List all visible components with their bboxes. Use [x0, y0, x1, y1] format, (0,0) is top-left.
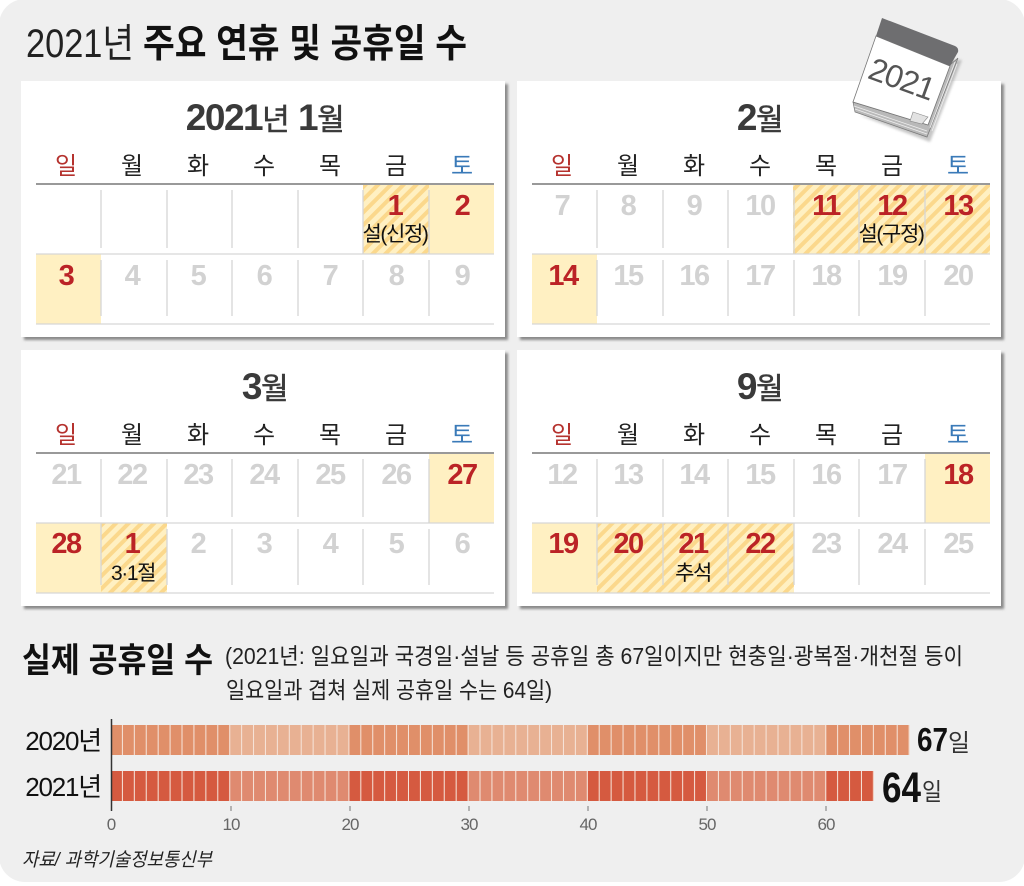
- weekday header: 수: [253, 422, 275, 449]
- weekday header: 화: [187, 153, 209, 180]
- weekday header: 일: [551, 153, 573, 180]
- month heading: 2월: [737, 97, 783, 138]
- dates: 1: [125, 528, 141, 560]
- weekday header: [551, 153, 969, 180]
- icon: desk calendar: 2021: [864, 51, 940, 107]
- dates: 8: [621, 190, 637, 222]
- axis: 40: [580, 815, 597, 834]
- title: 주요 연휴 및 공휴일 수: [143, 23, 467, 66]
- dates: 28: [51, 528, 82, 560]
- weekday header: [55, 422, 473, 449]
- dates: [51, 459, 477, 560]
- note text: 일요일과 겹쳐 실제 공휴일 수는 64일): [226, 677, 552, 703]
- note text: (2021년: 일요일과 국경일·설날 등 공휴일 총 67일이지만 현충일·광복절·개천절 등이: [225, 643, 963, 669]
- weekday header: 토: [947, 153, 969, 180]
- axis: [107, 719, 835, 834]
- dates: 7: [323, 260, 338, 292]
- dates: 15: [613, 260, 644, 292]
- dates: [59, 190, 471, 292]
- dates: 3: [257, 528, 273, 560]
- dates: 20: [613, 528, 643, 560]
- dates: 15: [745, 459, 776, 491]
- dates: 7: [555, 190, 570, 222]
- dates: 17: [877, 459, 907, 491]
- dates: 27: [447, 459, 477, 491]
- weekday header: [55, 153, 473, 180]
- weekday header: 금: [881, 422, 903, 449]
- icon: desk calendar: [853, 18, 962, 142]
- weekday header: 일: [55, 153, 77, 180]
- dates: 24: [249, 459, 280, 491]
- row label: 2021: 2021년: [25, 772, 101, 802]
- dates: 4: [125, 260, 141, 292]
- axis: 30: [461, 815, 478, 834]
- weekday header: [551, 422, 969, 449]
- dates: 4: [323, 528, 339, 560]
- month heading: 3월: [242, 366, 288, 407]
- weekday header: 월: [617, 153, 639, 180]
- note text: [225, 643, 963, 703]
- dates: 21: [51, 459, 82, 491]
- weekday header: 목: [815, 153, 837, 180]
- dates: 11: [812, 190, 841, 222]
- dates: 20: [943, 260, 973, 292]
- weekday header: 목: [815, 422, 837, 449]
- dates: 13: [613, 459, 644, 491]
- holiday label: 추석: [675, 562, 711, 585]
- dates: 8: [389, 260, 405, 292]
- title: [26, 22, 467, 66]
- dates: 17: [745, 260, 775, 292]
- dates: 5: [191, 260, 207, 292]
- weekday header: 토: [451, 422, 473, 449]
- dates: 6: [455, 528, 471, 560]
- dates: 9: [455, 260, 471, 292]
- dates: 5: [389, 528, 405, 560]
- value: 64: 64: [882, 764, 921, 812]
- dates: 6: [257, 260, 273, 292]
- dates: [547, 459, 974, 560]
- weekday header: 화: [187, 422, 209, 449]
- dates: 18: [943, 459, 974, 491]
- panel: January: [21, 81, 508, 340]
- dates: 16: [811, 459, 842, 491]
- dates: 12: [547, 459, 577, 491]
- panel: March: [21, 350, 508, 609]
- weekday header: 금: [385, 153, 407, 180]
- axis: 50: [699, 815, 716, 834]
- value: 67: 일: [948, 730, 970, 757]
- dates: 24: [877, 528, 908, 560]
- dates: 16: [679, 260, 710, 292]
- bar: 2021: [111, 771, 874, 801]
- dates: 23: [183, 459, 214, 491]
- dates: 1: [388, 190, 404, 222]
- holiday label: 설(신정): [363, 223, 428, 246]
- dates: 13: [943, 190, 974, 222]
- axis: 0: [107, 815, 116, 834]
- heading: actual holidays: 실제 공휴일 수: [22, 642, 213, 680]
- source: 자료/ 과학기술정보통신부: [22, 850, 213, 871]
- dates: 26: [381, 459, 412, 491]
- weekday header: 일: [55, 422, 77, 449]
- bar: 2020: [111, 725, 910, 755]
- dates: 14: [679, 459, 710, 491]
- dates: 21: [678, 528, 709, 560]
- weekday header: 수: [253, 153, 275, 180]
- dates: 9: [687, 190, 703, 222]
- weekday header: 월: [121, 153, 143, 180]
- weekday header: 금: [881, 153, 903, 180]
- weekday header: 월: [617, 422, 639, 449]
- panel: February: [517, 81, 1004, 340]
- dates: 23: [811, 528, 842, 560]
- axis: 20: [342, 815, 359, 834]
- holiday label: 설(구정): [859, 223, 924, 246]
- dates: 19: [548, 528, 579, 560]
- holiday label: 3·1절: [111, 562, 155, 585]
- dates: 3: [59, 260, 75, 292]
- axis: 60: [818, 815, 835, 834]
- dates: 10: [745, 190, 775, 222]
- weekday header: 화: [683, 422, 705, 449]
- row label: 2020: 2020년: [25, 726, 101, 756]
- weekday header: 일: [551, 422, 573, 449]
- weekday header: 월: [121, 422, 143, 449]
- dates: 2: [455, 190, 470, 222]
- value: 67: 67: [917, 721, 948, 758]
- weekday header: 화: [683, 153, 705, 180]
- weekday header: 수: [749, 422, 771, 449]
- dates: 22: [117, 459, 147, 491]
- weekday header: 토: [947, 422, 969, 449]
- dates: 19: [877, 260, 908, 292]
- month heading: 9월: [737, 366, 783, 407]
- dates: 25: [315, 459, 346, 491]
- value: 67: [917, 721, 970, 758]
- month heading: 2021년 1월: [186, 97, 344, 138]
- dates: 22: [745, 528, 775, 560]
- dates: 14: [548, 260, 579, 292]
- dates: 25: [943, 528, 974, 560]
- axis: 10: [223, 815, 240, 834]
- weekday header: 목: [319, 153, 341, 180]
- title: 2021년: [26, 22, 134, 66]
- dates: [548, 190, 974, 292]
- weekday header: 금: [385, 422, 407, 449]
- weekday header: 토: [451, 153, 473, 180]
- dates: 12: [877, 190, 907, 222]
- weekday header: 수: [749, 153, 771, 180]
- weekday header: 목: [319, 422, 341, 449]
- panel: September: [517, 350, 1004, 609]
- dates: 18: [811, 260, 842, 292]
- dates: 2: [191, 528, 206, 560]
- value: 64: 일: [922, 779, 942, 806]
- bar chart: [25, 719, 970, 834]
